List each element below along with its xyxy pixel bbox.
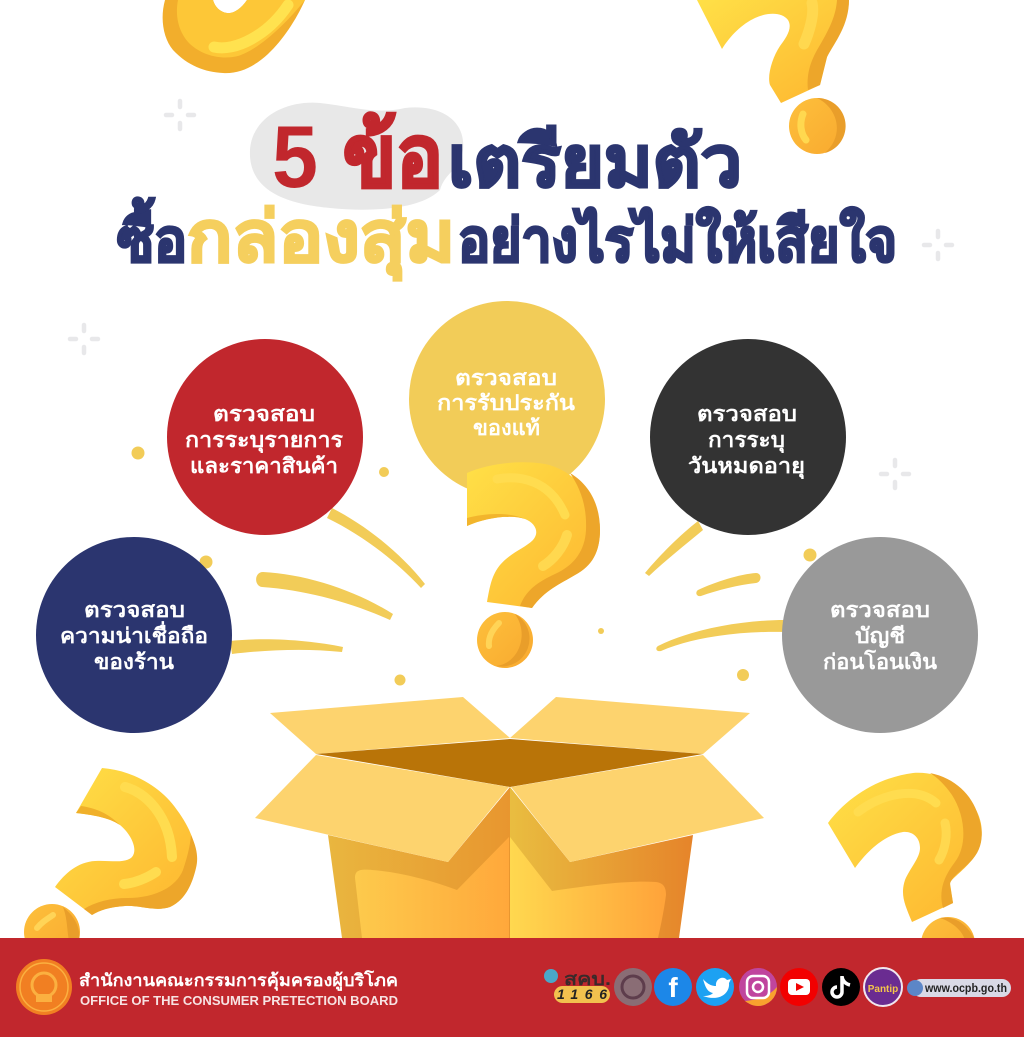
circle: authenticity guarantee (409, 301, 605, 497)
icon: hotline 1166: สคบ. (564, 969, 611, 989)
circle: authenticity guarantee: ของแท้ (473, 416, 540, 440)
sparkle decorations (70, 101, 952, 488)
box back flaps (270, 697, 510, 754)
title line 1: 5: 5 (272, 107, 318, 206)
icon: facebook: f (668, 972, 678, 1003)
footer bar (0, 938, 1024, 1037)
icon: question mark bottom right (828, 773, 982, 971)
icon: instagram (739, 968, 777, 1006)
icon: question mark top right (697, 0, 849, 154)
circle: item and price details: การระบุรายการ (185, 429, 344, 454)
icon: agency logo (614, 968, 652, 1006)
circle: store credibility: ความน่าเชื่อถือ (60, 620, 208, 648)
circle: account before transfer (782, 537, 978, 733)
icon: central question mark (467, 462, 600, 668)
website pill (907, 979, 1011, 997)
icon: question mark bottom left (24, 768, 197, 960)
title line 1: เตรียมตัว: เตรียมตัว (448, 123, 742, 201)
circle: account before transfer: บัญชี (855, 624, 905, 649)
title (117, 107, 897, 281)
icon: hotline 1166 (544, 969, 611, 1003)
icon: facebook (654, 968, 692, 1006)
circle: item and price details (167, 339, 363, 535)
office name Thai: สำนักงานคณะกรรมการคุ้มครองผู้บริโภค (79, 970, 398, 992)
box inner panels (355, 837, 509, 938)
icon: tiktok (822, 968, 860, 1006)
box body right (510, 787, 693, 938)
icon: office seal (16, 959, 72, 1015)
circle: store credibility: ของร้าน (94, 650, 175, 674)
icon: hotline 1166: 1166 (557, 986, 607, 1002)
circle: store credibility (36, 537, 232, 733)
box front flaps (255, 755, 509, 862)
title line 2: ซื้อ: ซื้อ (117, 197, 187, 274)
icon: youtube (780, 968, 818, 1006)
icon: twitter (696, 968, 734, 1006)
icon: open cardboard box (255, 697, 764, 938)
circle: expiry date (650, 339, 846, 535)
circle: expiry date: วันหมดอายุ (688, 455, 805, 480)
title line 1: ข้อ: ข้อ (343, 109, 443, 205)
icon: question mark top left (163, 0, 305, 73)
circle: account before transfer: ก่อนโอนเงิน (823, 649, 938, 674)
circle: expiry date: ตรวจสอบ (697, 403, 797, 426)
circle: authenticity guarantee: การรับประกัน (437, 392, 576, 415)
decorative blob behind title (250, 103, 463, 210)
title line 2: อย่างไรไม่ให้เสียใจ: อย่างไรไม่ให้เสียใจ (458, 206, 897, 274)
circle: account before transfer: ตรวจสอบ (830, 599, 930, 622)
website pill: www.ocpb.go.th (924, 983, 1007, 995)
office name English: OFFICE OF THE CONSUMER PRETECTION BOARD (80, 994, 398, 1008)
icon: pantip (864, 968, 902, 1006)
confetti streaks and dots (132, 446, 816, 686)
box opening (316, 739, 703, 787)
circle: expiry date: การระบุ (708, 429, 785, 454)
box body left (328, 787, 510, 938)
title line 2: กล่องสุ่ม: กล่องสุ่ม (187, 198, 455, 281)
circle: item and price details: และราคาสินค้า (190, 454, 338, 478)
icon: pantip: Pantip (868, 984, 898, 995)
circle: item and price details: ตรวจสอบ (213, 403, 315, 426)
circle: authenticity guarantee: ตรวจสอบ (455, 367, 557, 390)
circle: store credibility: ตรวจสอบ (84, 599, 185, 622)
